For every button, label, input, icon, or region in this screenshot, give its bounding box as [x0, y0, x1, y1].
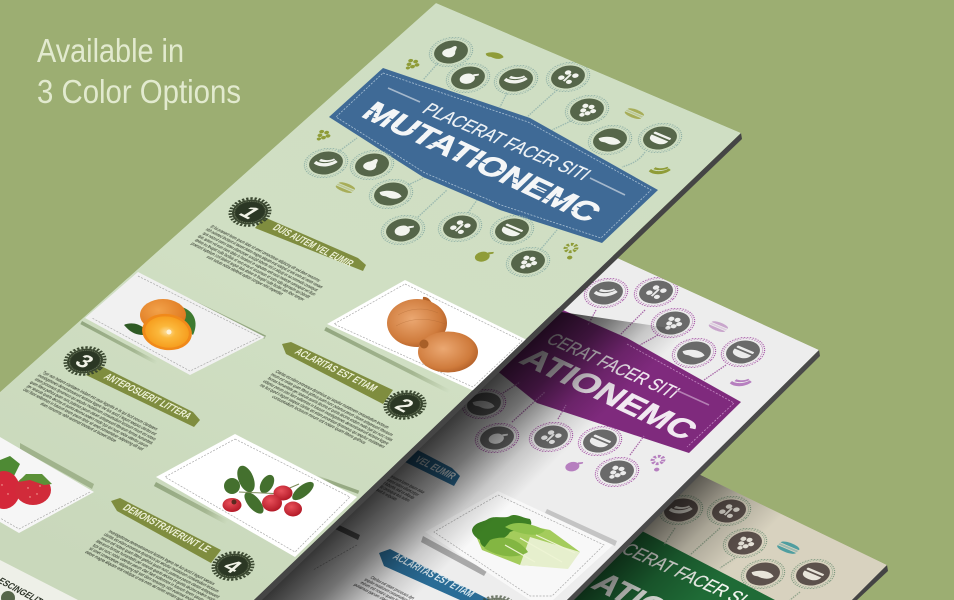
text block 3: quam littera gothica quam nunc putamus parum claram anteposuerit litterarum formas humanitatis — [28, 380, 155, 446]
text block 1: Et lisi praesent lorem ipsum dolor sit amet consectetuer adipiscing elit sed diam nonummy — [208, 224, 322, 283]
text block 3: diam nonummy nibh euismod tincidunt ut laoreet dolore — [38, 402, 118, 444]
text block 3: investigationes demonstraverunt lectores legere me lius quod ii legunt saepius claritas est — [36, 373, 158, 437]
connector lines: beige sheet — [664, 528, 800, 600]
photo card: orange — [80, 272, 266, 375]
text block 1: nibh euismod tincidunt ut laoreet dolore magna aliquam erat volutpat ut wisi enim ad minim veniam — [204, 227, 324, 290]
text block: purple sheet upper: hendrerit in vulputate — [369, 485, 399, 502]
rose hips — [222, 463, 317, 517]
ribbon 4: demonstraverunt le: DEMONSTRAVERUNT LE — [120, 503, 213, 555]
banner title: green sheet — [590, 544, 748, 600]
connector lines: green sheet — [338, 63, 645, 250]
banner: blue — [329, 68, 658, 243]
text block 2: me lius quod ii legunt saepius claritas est etiam processus dynamicus qui sequitur mutationem — [258, 383, 386, 450]
heading: available in 3 color options — [37, 32, 241, 110]
small olive icons — [312, 50, 672, 263]
banner: purple — [490, 300, 741, 453]
text block 1: dolore eu feugiat nulla facilisis at vero eros et accumsan et iusto odio dignissim qui blandit — [193, 238, 312, 300]
text block 2: formas humanitatis per seacula quarta decima et quinta decima eodem modo typi qui nunc nobis — [266, 376, 394, 443]
text block 2: videntur parum clari fiant sollemnes in futurum investigationes demonstraverunt lectores legere — [261, 379, 390, 446]
icon: teal macaron — [777, 542, 800, 554]
text block 1: quis nostrud exerci tation ullamcorper suscipit lobortis nisl ut aliquip ex ea commodo consequat — [201, 231, 319, 293]
text block: purple sheet upper: Et lisi praesent lorem ipsum dolor — [380, 470, 426, 495]
badge 1 — [228, 197, 272, 227]
text block 1 — [190, 224, 322, 301]
text block 2: Claritas est etiam processus dynamicus qui sequitur mutationem consuetudium lectorum — [273, 369, 390, 430]
onions — [387, 297, 478, 372]
footer band — [0, 560, 78, 600]
badge 1: 1 — [235, 201, 264, 223]
ribbon 3: anteposuerit littera: ANTEPOSUERIT LITTERA — [101, 372, 194, 421]
text block 2: consuetudium lectorum mirum est notare quam littera gothica — [270, 395, 367, 445]
ribbon: vel eumir: VEL EUMIR — [412, 455, 458, 482]
badge 2 — [384, 390, 426, 420]
text block 3: Typi non habent claritatem insitam est usus legentis in iis qui facit eorum claritatem — [40, 370, 159, 432]
icon circles: green sheet — [296, 32, 690, 282]
text block: purple sheet upper: nostrud exerci tation ullamcorper — [375, 473, 421, 498]
ribbon 3: anteposuerit littera — [86, 363, 200, 427]
title: mutationemc: MUTATIONEMC — [355, 96, 609, 228]
photo card: onion — [324, 280, 527, 394]
photo card: rose hips — [154, 434, 359, 557]
badge 3 — [57, 342, 113, 380]
banner: green — [574, 532, 775, 600]
text block 1: praesent luptatum zzril delenit augue duis dolore te feugait nulla facilisi nam liber tempor — [189, 242, 306, 302]
shadow on beige sheet — [574, 474, 774, 600]
panel: green sheet — [0, 3, 742, 600]
text block 3: per seacula quarta decima et quinta decima eodem modo typi qui nunc nobis videntur parum — [25, 384, 150, 449]
banner title: purple sheet: CERAT FACER SITI — [541, 330, 684, 402]
banner title: purple sheet: ATIONEMC — [513, 342, 705, 446]
icon circles: beige sheet — [660, 495, 836, 589]
small icons: purple sheet — [563, 320, 753, 473]
text block 3: etiam processus dynamicus qui sequitur mutationem consuetudium lectorum mirum est notare — [33, 377, 157, 442]
ribbon 4: demonstraverunt le — [111, 498, 221, 563]
text block: purple sheet upper — [376, 476, 425, 502]
text block: purple sheet upper: suscipit lobortis nisl ut aliquip — [372, 477, 416, 500]
ribbon 2: aclaritas est etiam — [282, 342, 393, 404]
ribbon: vel eumir — [405, 447, 460, 486]
badge 4: 4 — [218, 555, 248, 578]
text block: purple sheet upper: commodo consequat duis autem — [369, 480, 411, 503]
text block 2 — [253, 369, 402, 453]
text block 3: clari fiant sollemnes in futurum lorem ipsum dolor sit amet consectetuer adipiscing elit sed — [21, 388, 145, 452]
badge 4 — [205, 547, 261, 585]
badge 2: 2 — [390, 394, 419, 416]
lettuce — [472, 515, 580, 569]
heading: available in 3 color options: 3 Color Options — [37, 73, 241, 110]
ghost card strip — [313, 524, 360, 570]
icon circles: purple sheet — [454, 272, 773, 492]
orange fruit — [124, 299, 196, 353]
photo card: lettuce — [421, 491, 617, 600]
ribbon 2: aclaritas est etiam: ACLARITAS EST ETIAM — [292, 347, 380, 394]
panel: purple sheet — [240, 250, 820, 600]
badge 3: 3 — [70, 350, 99, 372]
banner stitching: purple — [627, 344, 734, 447]
ribbon 1: duis autem vel eumir: DUIS AUTEM VEL EUMIR — [270, 223, 356, 269]
connector lines: purple sheet — [503, 310, 726, 455]
text block 4 — [82, 529, 229, 600]
text block 1: duis autem vel eum iriure dolor in hendrerit in vulputate velit esse molestie consequat vel illum — [196, 234, 317, 297]
strawberries — [0, 456, 52, 509]
text block 2: mirum est notare quam littera gothica quam nunc putamus parum claram anteposuerit litterarum — [269, 372, 394, 438]
photo card: strawberry — [0, 437, 94, 533]
heading: available in 3 color options: Available in — [37, 32, 184, 69]
panel: beige sheet — [574, 475, 888, 600]
ribbon 1: duis autem vel eumir — [255, 217, 366, 271]
title ornament lines — [388, 88, 625, 195]
subtitle: placerat facer siti: PLACERAT FACER SITI — [417, 100, 595, 184]
text block 3 — [16, 370, 166, 456]
badge: number on purple sheet — [482, 595, 512, 600]
text block 1: cum soluta nobis eleifend option congue nihil imperdiet — [205, 255, 284, 297]
shadow on purple sheet — [254, 311, 675, 600]
text block: purple sheet lower — [353, 576, 414, 600]
